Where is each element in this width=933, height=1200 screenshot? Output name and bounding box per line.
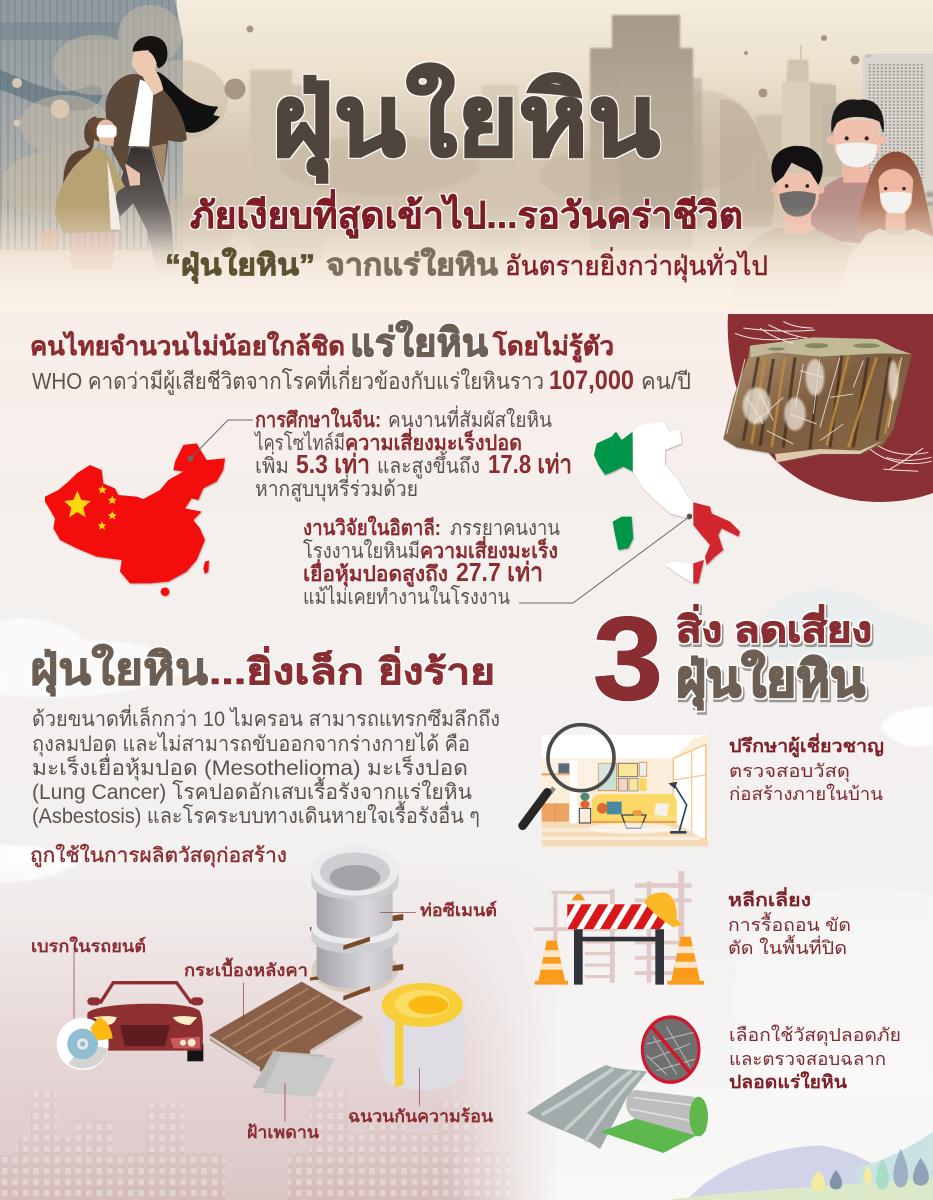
text block: dust description: (Asbestosis) และโรคระบบทางเดินหายใจเรื้อรังอื่น ๆ [32,801,480,828]
callout line: China [188,420,253,461]
icon: asbestos rock [723,337,912,462]
text block: consult experts: ตรวจสอบวัสดุ [729,761,850,782]
text block: China study: การศึกษาในจีน: [255,407,381,432]
text block: Italy research: 27.7 เท่า [456,557,543,587]
label: ceiling: ฝ้าเพดาน [247,1123,319,1142]
text block: Italy research: โรงงานใยหินมี [303,539,420,563]
subtitle: silent danger: ภัยเงียบที่สูดเข้าไป...รอวันคร่าชีวิต [190,189,743,239]
map: China [45,443,225,596]
text block: choose safe materials [729,1024,901,1092]
text block: consult experts [729,733,884,804]
heading: 3 ways to reduce risk: ฝุ่นใยหิน [676,650,865,710]
leader lines [74,913,419,1122]
text block: consult experts: ปรึกษาผู้เชี่ยวชาญ [729,733,884,758]
panel: maroon backdrop with asbestos rock [723,314,933,502]
text block: choose safe materials: ปลอดแร่ใยหิน [729,1071,848,1092]
text block: dust description: มะเร็งเยื่อหุ้มปอด (Mesothelioma) มะเร็งปอด [32,753,468,781]
subtitle: more dangerous than dust: “ฝุ่นใยหิน” [165,247,315,284]
WHO statistic: WHO คาดว่ามีผู้เสียชีวิตจากโรคที่เกี่ยวข้องกับแร่ใยหินราว [32,365,544,395]
callout line: Italy [519,514,692,603]
label: heat insulation: ฉนวนกันความร้อน [348,1107,493,1126]
label: cement pipe: ท่อซีเมนต์ [420,900,497,920]
text block: dust description: ด้วยขนาดที่เล็กกว่า 10 ไมครอน สามารถแทรกซึมลึกถึง [32,704,500,731]
heading: the smaller, the deadlier: ฝุ่นใยหิน [30,643,208,697]
icon: car [87,983,203,1061]
heading: the smaller, the deadlier [30,643,495,697]
text block: dust description: (Lung Cancer) โรคปอดอักเสบเรื้อรังจากแร่ใยหิน [32,777,472,804]
heading: 3 ways to reduce risk: 3 [593,593,663,725]
text block: China study: และสูงขึ้นถึง [377,451,480,479]
icon: brake disc [57,1017,113,1070]
icon: ceiling boards [252,1051,335,1097]
text block: China study: ความเสี่ยงมะเร็งปอด [345,427,522,455]
subtitle: more dangerous than dust: อันตรายยิ่งกว่าฝุ่นทั่วไป [505,247,768,283]
title: ฝุ่นใยหิน [272,63,660,183]
map: Italy [594,422,740,583]
text block: Italy research [303,515,560,609]
heading: the smaller, the deadlier: ยิ่งร้าย [378,646,495,692]
text block: avoid demolition [728,887,851,958]
text block: China study: คนงานที่สัมผัสใยหิน [388,405,552,432]
text block: avoid demolition: การรื้อถอน ขัด [728,912,851,935]
heading: the smaller, the deadlier: ...ยิ่งเล็ก [209,646,364,692]
heading: Thais close to asbestos: คนไทยจำนวนไม่น้อยใกล้ชิด [30,330,345,361]
heading: 3 ways to reduce risk [593,593,872,725]
text block: dust description [32,704,500,828]
hero dusty sky [0,0,933,273]
text block: China study: 17.8 เท่า [488,449,572,479]
icon: roadblock and cones [534,871,704,985]
text block: Italy research: เยื่อหุ้มปอดสูงถึง [303,558,448,588]
label: car brakes: เบรกในรถยนต์ [31,936,146,956]
text block: Italy research: ความเสี่ยงมะเร็ง [420,535,558,563]
text block: choose safe materials: และตรวจสอบฉลาก [729,1049,886,1069]
heading: Thais close to asbestos: โดยไม่รู้ตัว [492,330,614,363]
text block: China study: หากสูบบุหรี่ร่วมด้วย [255,474,418,502]
landscape: hills and trees [667,1132,933,1200]
illustration: three people wearing masks [720,45,933,259]
text block: choose safe materials: เลือกใช้วัสดุปลอดภัย [729,1024,901,1046]
heading: 3 ways to reduce risk: สิ่ง ลดเสี่ยง [676,604,872,650]
dust particles [224,26,860,100]
text block: Italy research: งานวิจัยในอิตาลี: [303,515,441,540]
WHO statistic: คน/ปี [641,368,691,394]
text block: China study: 5.3 เท่า [296,449,370,479]
icon: living room under magnifier [523,725,708,847]
panel: construction materials illustration [57,846,463,1122]
label: roof tiles: กระเบื้องหลังคา [184,957,308,980]
panel: hero header [0,0,933,312]
left building [0,0,235,255]
illustration: mother and child [39,36,220,287]
hero bottom fade [0,205,933,312]
pink city backdrop [0,916,542,1200]
background clouds [0,590,933,1100]
hero city skyline [250,15,933,260]
text block: consult experts: ก่อสร้างภายในบ้าน [729,783,883,804]
text block: dust description: ถุงลมปอด และไม่สามารถขับออกจากร่างกายได้ คือ [32,732,470,757]
icon: asbestos fibres [735,321,932,471]
heading: Thais close to asbestos: แร่ใยหิน [350,320,488,365]
text block: avoid demolition: ตัด ในพื้นที่ปิด [728,935,847,958]
text block: Italy research: แม้ไม่เคยทำงานในโรงงาน [303,585,510,609]
text block: avoid demolition: หลีกเลี่ยง [728,887,811,910]
icon: safe materials [527,1017,708,1153]
text block: Italy research: ภรรยาคนงาน [450,517,560,540]
icon: insulation roll [382,983,463,1090]
WHO statistic: 107,000 [549,365,634,395]
icon: roof tiles [209,982,363,1072]
text block: China study: เพิ่ม [255,451,289,478]
subtitle: more dangerous than dust: จากแร่ใยหิน [326,247,499,282]
heading: used in construction materials: ถูกใช้ในการผลิตวัสดุก่อสร้าง [30,844,287,868]
subtitle: more dangerous than dust [165,247,768,284]
text block: China study: ไครโซไทล์มี [253,431,345,455]
icon: cement pipes [310,846,403,1001]
smog clouds [280,90,758,200]
text block: China study [253,405,572,502]
heading: Thais close to asbestos [30,320,614,365]
